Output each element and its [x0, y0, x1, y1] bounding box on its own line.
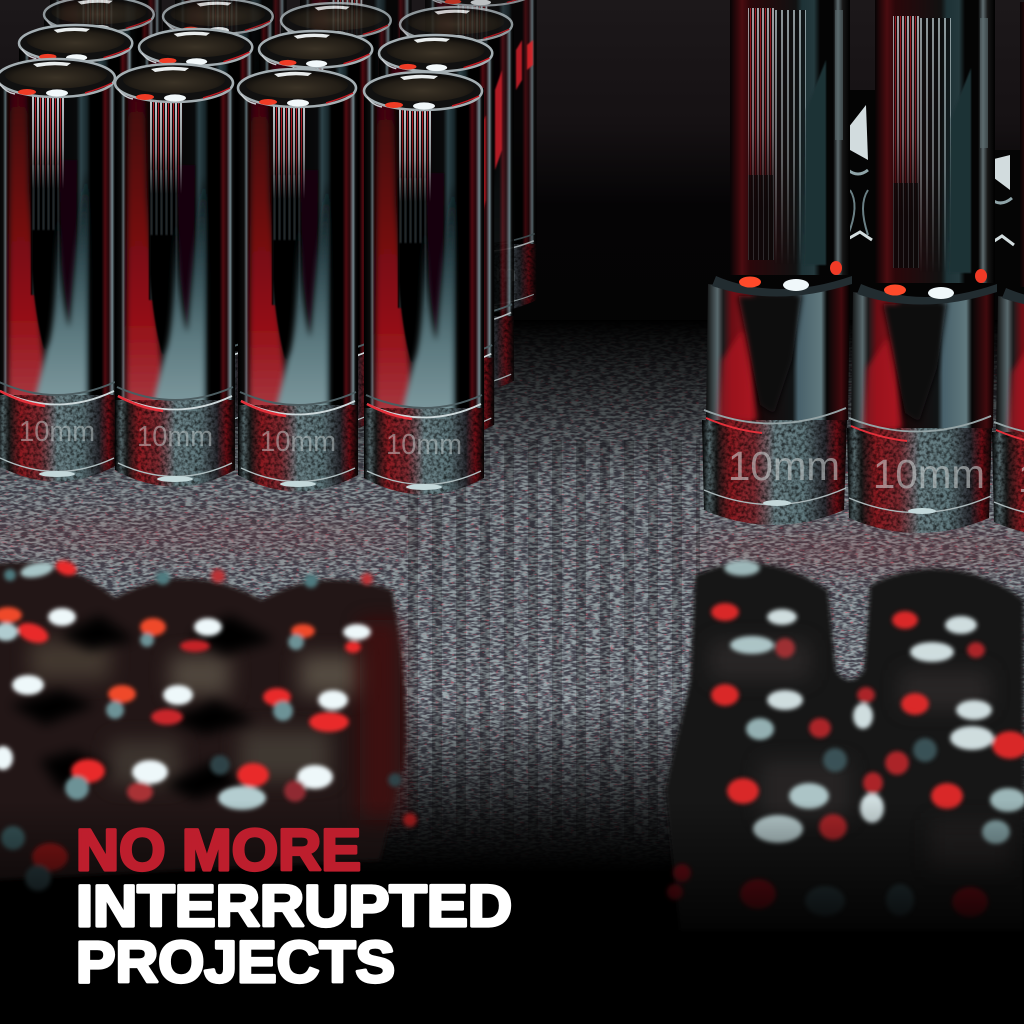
panel: rear rows of deep sockets — [19, 0, 537, 441]
socket 6 — [847, 0, 997, 533]
panel: right row of 10mm sockets — [702, 0, 1024, 537]
blurred base — [0, 562, 406, 880]
diamond gaps — [838, 90, 1024, 280]
title — [76, 818, 512, 995]
bottom dark fade — [0, 800, 1024, 1024]
socket 5 — [702, 0, 852, 525]
socket row 3 — [44, 0, 514, 396]
headline line 2: INTERRUPTED — [76, 874, 512, 939]
panel: textured mat — [0, 320, 1024, 920]
bokeh lights — [667, 560, 1024, 917]
headline line 1: NO MORE — [76, 818, 361, 883]
panel: blurred foreground sockets left — [0, 558, 417, 891]
socket 4 — [364, 72, 484, 494]
bokeh lights — [0, 558, 417, 891]
panel: blurred foreground sockets right — [665, 560, 1024, 930]
red side reflections — [478, 40, 533, 230]
socket row 4 — [50, 0, 537, 313]
socket 3 — [238, 69, 358, 492]
blurred base — [665, 563, 1024, 930]
socket 1 — [0, 59, 117, 482]
socket 2 — [115, 64, 235, 486]
socket row 2 — [19, 25, 494, 441]
socket 7 — [992, 2, 1024, 537]
panel: front row of 10mm deep sockets — [0, 59, 484, 494]
headline line 3: PROJECTS — [76, 930, 395, 995]
